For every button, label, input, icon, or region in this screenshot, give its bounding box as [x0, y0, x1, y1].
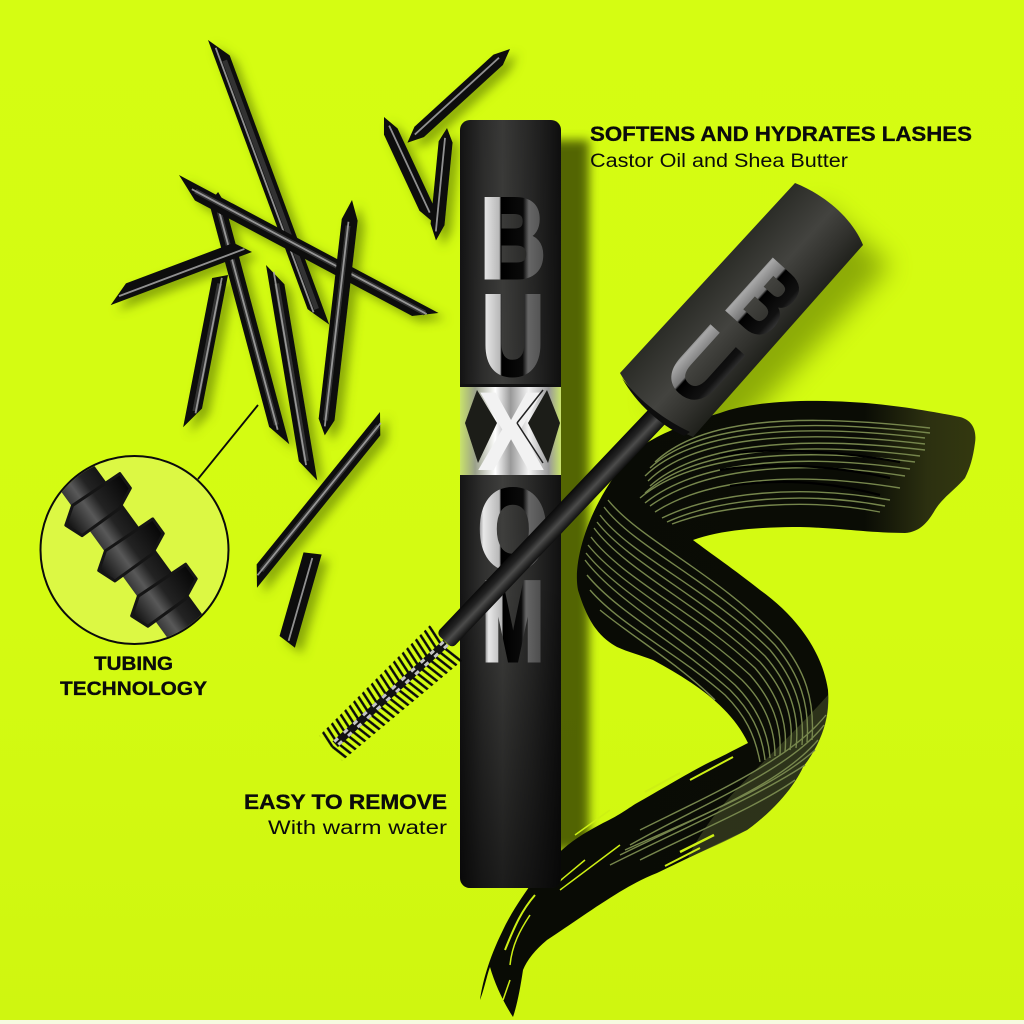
scattered tubing pieces: [105, 35, 515, 648]
wand stem: [436, 397, 676, 648]
wand brush: [315, 625, 462, 766]
callout: tubing technology magnifier: [40, 455, 230, 645]
wand cap: [620, 183, 863, 437]
swatch streaks: lower tail: [503, 715, 826, 1000]
cap letters: U: [646, 307, 762, 426]
mascara tube body: [460, 120, 561, 888]
mascara swatch: [480, 401, 975, 1017]
label: tubing technology: TECHNOLOGY: [60, 678, 207, 700]
headline: easy to remove: With warm water: [268, 818, 448, 839]
headline: easy to remove: EASY TO REMOVE: [244, 790, 447, 814]
transparent window band: [460, 369, 561, 494]
headline: softens and hydrates: [590, 122, 972, 172]
brand letters: M: [482, 560, 544, 685]
label: tubing technology: TUBING: [94, 653, 173, 675]
leader line to callout: [198, 405, 258, 479]
icon: tubing screw close-up: [62, 466, 202, 637]
label: tubing technology: [60, 653, 207, 700]
headline: softens and hydrates: SOFTENS AND HYDRATES LASHES: [590, 122, 972, 146]
headline: easy to remove: [244, 790, 448, 839]
cap shadow: [650, 205, 890, 450]
brand letters: B: [481, 177, 545, 301]
headline: softens and hydrates: Castor Oil and Shea Butter: [590, 151, 849, 172]
swatch streaks: middle band: [585, 500, 813, 762]
mascara tube shadow: [535, 140, 589, 850]
cap letters: [646, 240, 824, 426]
brand letters: U: [482, 274, 544, 399]
brand letters: [478, 177, 548, 685]
mascara wand: [315, 397, 676, 766]
swatch streaks: upper band: [640, 420, 930, 524]
swatch olive fold: [688, 695, 828, 858]
brand letters: O: [478, 468, 548, 592]
cap letters: B: [708, 240, 824, 359]
transparent window band: X: [477, 369, 545, 494]
